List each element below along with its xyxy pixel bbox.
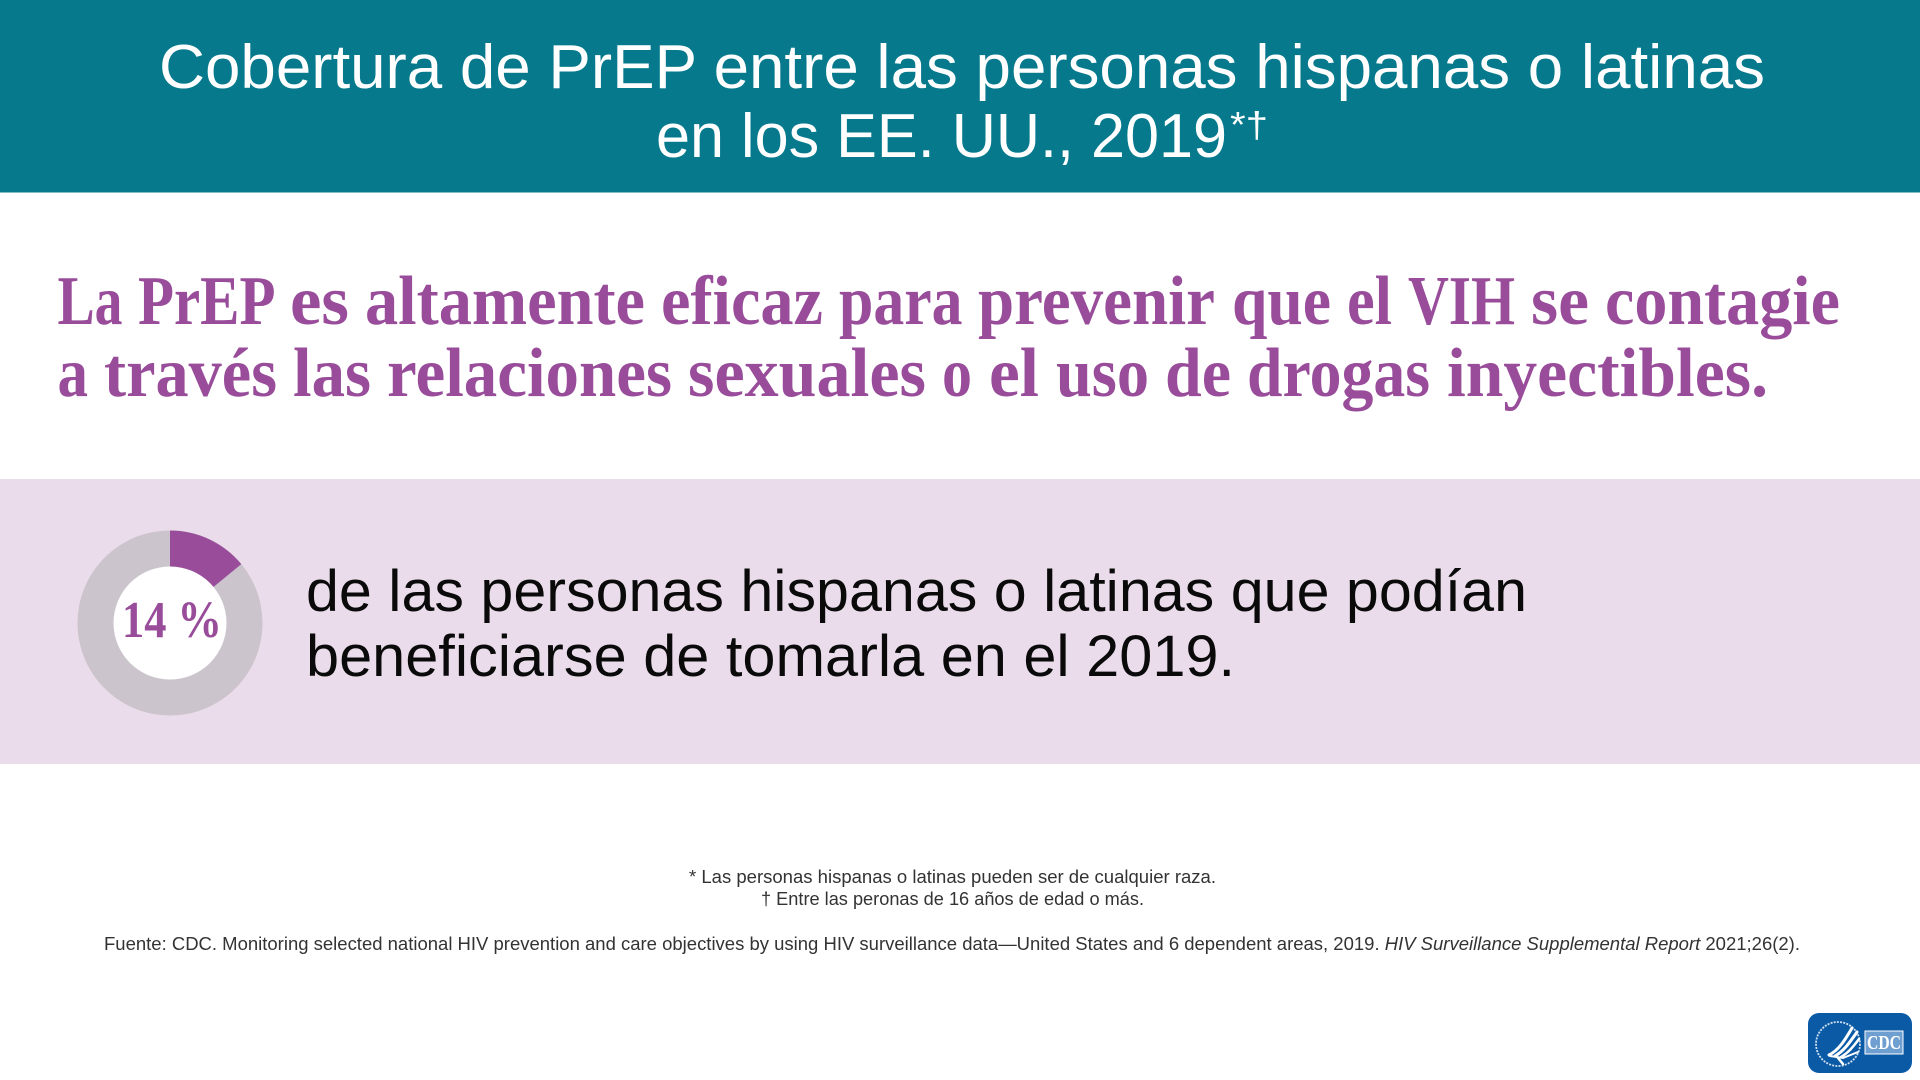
statistic description [306, 559, 1527, 689]
heading: PrEP statement: el [1347, 263, 1392, 340]
source citation: Fuente: CDC. Monitoring selected national HIV prevention and care objectives by using HIV surveillance data—United States and 6 dependent areas, 2019. HIV Surveillance Supplemental Report 2021;26(2). [104, 934, 1800, 954]
icon: CDC logo: CDC [1867, 1032, 1901, 1054]
heading: PrEP statement: es [290, 263, 349, 340]
heading: PrEP statement [58, 263, 1840, 412]
statistic description: beneficiarse de tomarla en el 2019. [306, 624, 1235, 689]
title: *† [1230, 104, 1268, 145]
heading: PrEP statement: de [1165, 335, 1231, 412]
heading: PrEP statement: que [1232, 263, 1331, 340]
footnotes: † Entre las peronas de 16 años de edad o más. [761, 889, 1144, 909]
heading: PrEP statement: prevenir [978, 263, 1215, 340]
heading: PrEP statement: las [293, 335, 371, 412]
statistic description: de las personas hispanas o latinas que podían [306, 559, 1527, 624]
footnotes: * Las personas hispanas o latinas pueden ser de cualquier raza. [689, 867, 1216, 887]
heading: PrEP statement: se [1531, 263, 1589, 340]
heading: PrEP statement: relaciones [387, 335, 672, 412]
heading: PrEP statement: eficaz [661, 263, 823, 340]
heading: PrEP statement: a [58, 335, 88, 412]
heading: PrEP statement: el [989, 335, 1039, 412]
heading: PrEP statement: o [942, 335, 972, 412]
heading: PrEP statement: VIH [1408, 263, 1515, 340]
title [159, 33, 1765, 171]
title: Cobertura de PrEP entre las personas hispanas o latinas [159, 33, 1765, 102]
heading: PrEP statement: para [839, 263, 962, 340]
heading: PrEP statement: inyectibles. [1447, 335, 1768, 412]
footnotes [104, 867, 1800, 954]
donut label: 14 % [122, 592, 222, 649]
header banner [0, 0, 1920, 192]
heading: PrEP statement: drogas [1247, 335, 1430, 412]
heading: PrEP statement: través [104, 335, 277, 412]
donut chart: 14 percent [78, 530, 262, 716]
panel: statistic band [0, 479, 1920, 764]
heading: PrEP statement: La [58, 263, 122, 340]
title: en los EE. UU., 2019 [656, 102, 1227, 171]
heading: PrEP statement: sexuales [688, 335, 926, 412]
heading: PrEP statement: uso [1056, 335, 1149, 412]
heading: PrEP statement: contagie [1605, 263, 1840, 340]
heading: PrEP statement: altamente [365, 263, 645, 340]
icon: CDC logo [1808, 1013, 1912, 1073]
heading: PrEP statement: PrEP [138, 263, 276, 340]
